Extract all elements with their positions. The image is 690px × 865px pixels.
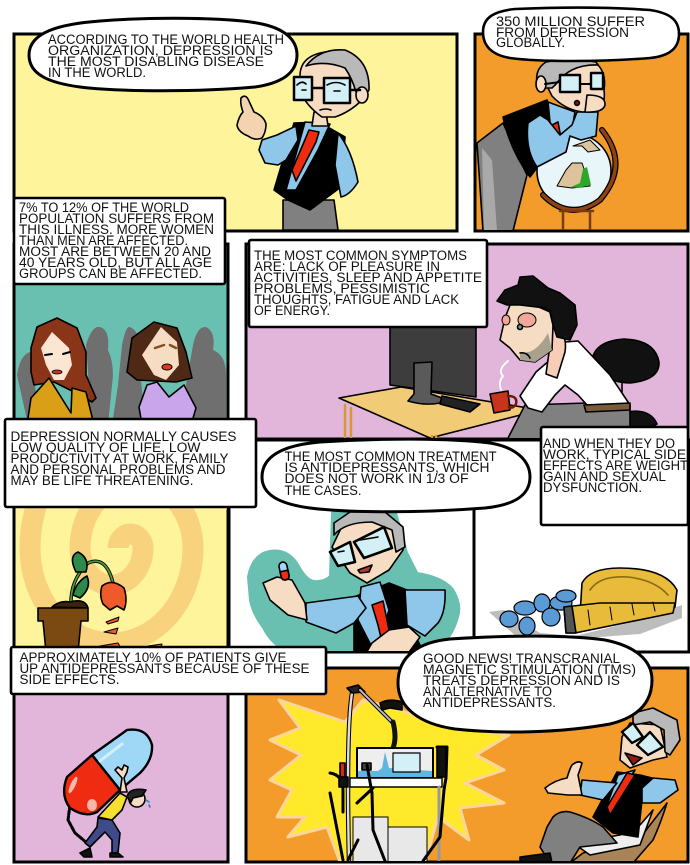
- caption: population share: GROUPS CAN BE AFFECTED.: [19, 266, 202, 281]
- panel: TMS alternative: [246, 668, 688, 863]
- caption: quality of life: [5, 419, 256, 507]
- caption: population share: THAN MEN ARE AFFECTED.: [19, 233, 188, 248]
- figure: wilting tulip in pot: [38, 552, 162, 652]
- caption: population share: 40 YEARS OLD, BUT ALL AGE: [19, 255, 212, 270]
- caption: patients giving up: UP ANTIDEPRESSANTS BECAUSE OF THESE: [20, 661, 310, 676]
- figure: doctor holding pill: [263, 512, 445, 655]
- caption: side effects: EFFECTS ARE WEIGHT: [543, 458, 688, 473]
- panel: globe statistic: [475, 34, 688, 231]
- figure: two sad women with silhouettes: [17, 318, 226, 425]
- caption: side effects: [541, 427, 688, 525]
- icon: pills and tape measure: [489, 568, 682, 640]
- panel: pill burden: [14, 652, 228, 862]
- speech bubble: antidepressants: IS ANTIDEPRESSANTS, WHICH: [284, 460, 490, 475]
- speech bubble: 350 million: [483, 8, 679, 61]
- figure: tired man at desk: [497, 276, 659, 440]
- speech bubble: antidepressants: THE MOST COMMON TREATMENT: [284, 449, 496, 464]
- caption: side effects: WORK, TYPICAL SIDE: [543, 447, 686, 462]
- caption: symptoms: [249, 240, 487, 327]
- speech bubble: TMS good news: MAGNETIC STIMULATION (TMS): [423, 662, 636, 677]
- speech bubble: 350 million: GLOBALLY.: [496, 35, 565, 50]
- caption: population share: POPULATION SUFFERS FROM: [19, 211, 214, 226]
- caption: population share: [14, 198, 225, 284]
- caption: patients giving up: APPROXIMATELY 10% OF PATIENTS GIVE: [20, 650, 286, 665]
- panel: affected women: [14, 244, 228, 430]
- caption: quality of life: MAY BE LIFE THREATENING.: [10, 473, 194, 488]
- caption: quality of life: LOW QUALITY OF LIFE, LOW: [10, 440, 201, 455]
- caption: symptoms: ACTIVITIES, SLEEP AND APPETITE: [254, 270, 482, 285]
- speech bubble: 350 million: FROM DEPRESSION: [496, 25, 629, 40]
- panel: side effects: [474, 440, 689, 652]
- speech bubble: most disabling disease: ACCORDING TO THE WORLD HEALTH: [48, 32, 284, 47]
- panel: WHO statement: [14, 34, 457, 231]
- caption: symptoms: ARE: LACK OF PLEASURE IN: [254, 259, 440, 274]
- speech bubble: antidepressants: [262, 439, 530, 512]
- speech bubble: most disabling disease: [29, 18, 297, 91]
- speech bubble: most disabling disease: IN THE WORLD.: [48, 65, 146, 80]
- caption: symptoms: THOUGHTS, FATIGUE AND LACK: [254, 292, 459, 307]
- figure: doctor leaning on globe: [477, 60, 616, 231]
- caption: symptoms: PROBLEMS, PESSIMISTIC: [254, 281, 430, 296]
- background: spiral: [20, 508, 227, 646]
- speech bubble: TMS good news: [398, 636, 652, 732]
- panel: wilting plant: [12, 508, 228, 646]
- speech bubble: most disabling disease: ORGANIZATION, DEPRESSION IS: [48, 43, 273, 58]
- speech bubble: TMS good news: ANTIDEPRESSANTS.: [423, 695, 556, 710]
- caption: patients giving up: SIDE EFFECTS.: [20, 672, 120, 687]
- figure: TMS machine: [330, 685, 447, 862]
- figure: man carrying giant capsule: [64, 730, 152, 857]
- caption: population share: MOST ARE BETWEEN 20 AND: [19, 244, 211, 259]
- speech bubble: most disabling disease: THE MOST DISABLING DISEASE: [48, 54, 264, 69]
- caption: side effects: DYSFUNCTION.: [543, 480, 642, 495]
- figure: smiling seated doctor: [520, 708, 680, 863]
- caption: symptoms: THE MOST COMMON SYMPTOMS: [254, 248, 467, 263]
- caption: symptoms: OF ENERGY.: [254, 303, 330, 318]
- caption: quality of life: AND PERSONAL PROBLEMS AND: [10, 462, 226, 477]
- caption: side effects: AND WHEN THEY DO: [543, 436, 675, 451]
- panel: treatment: [229, 440, 474, 655]
- figure: doctor pointing up: [237, 50, 369, 230]
- icon: coffee mug: [490, 361, 516, 413]
- speech bubble: TMS good news: AN ALTERNATIVE TO: [423, 684, 552, 699]
- caption: patients giving up: [11, 647, 326, 694]
- speech bubble: antidepressants: THE CASES.: [284, 483, 362, 498]
- speech bubble: TMS good news: GOOD NEWS! TRANSCRANIAL: [423, 651, 620, 666]
- panel: symptoms: [246, 244, 688, 440]
- speech bubble: TMS good news: TREATS DEPRESSION AND IS: [423, 673, 620, 688]
- caption: quality of life: DEPRESSION NORMALLY CAUSES: [10, 429, 236, 444]
- caption: population share: THIS ILLNESS. MORE WOMEN: [19, 222, 214, 237]
- background: yellow starburst: [270, 700, 509, 862]
- caption: quality of life: PRODUCTIVITY AT WORK, FAMILY: [10, 451, 228, 466]
- background: teal blob: [250, 513, 457, 650]
- speech bubble: 350 million: 350 MILLION SUFFER: [496, 14, 645, 29]
- caption: side effects: GAIN AND SEXUAL: [543, 469, 666, 484]
- speech bubble: antidepressants: DOES NOT WORK IN 1/3 OF: [284, 471, 468, 486]
- figure: monitor on desk: [338, 328, 524, 438]
- caption: population share: 7% TO 12% OF THE WORLD: [19, 200, 189, 215]
